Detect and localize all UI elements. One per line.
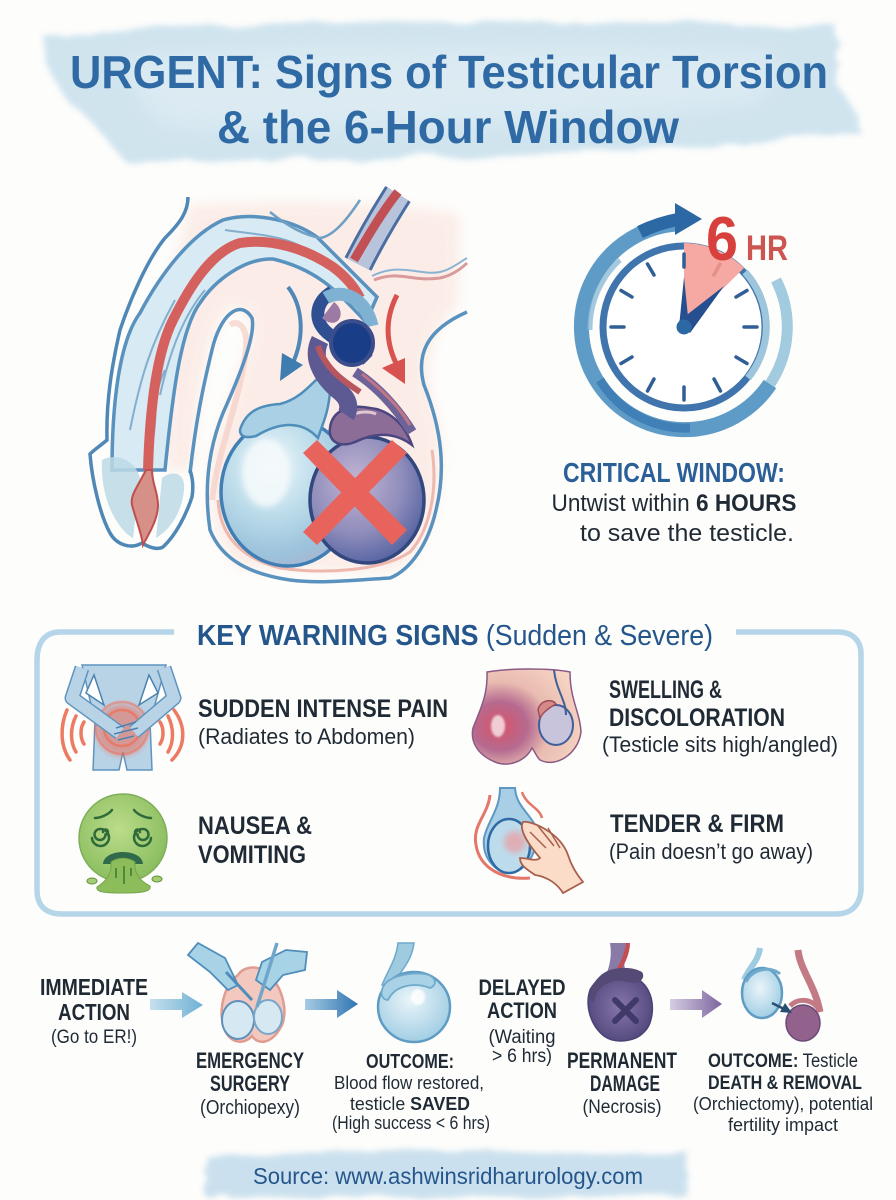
small side cord — [374, 263, 467, 280]
text: emergency surgery: EMERGENCY — [196, 1048, 304, 1073]
text: outcome saved: (High success < 6 hrs) — [332, 1113, 490, 1133]
text: outcome death: DEATH & REMOVAL — [708, 1072, 862, 1094]
panel: key warning signs — [37, 620, 861, 914]
flow: immediate action: ACTION — [58, 999, 130, 1025]
text: outcome saved: OUTCOME: — [366, 1051, 454, 1073]
panel frame — [37, 632, 861, 914]
text: nausea: NAUSEA & — [198, 812, 312, 840]
text: tender: (Pain doesn’t go away) — [609, 839, 813, 864]
text: emergency surgery: (Orchiopexy) — [200, 1097, 300, 1119]
glans lobes — [102, 457, 140, 538]
icon: swelling — [472, 669, 581, 764]
urethra red line — [148, 242, 360, 470]
title: URGENT: Signs of Testicular Torsion — [70, 46, 828, 98]
text: outcome saved: Blood flow restored, — [334, 1072, 484, 1093]
title: & the 6-Hour Window — [217, 101, 679, 153]
arrow: surgery to outcome — [305, 990, 358, 1018]
text: outcome death: OUTCOME: Testicle — [708, 1050, 858, 1072]
icon: abdominal pain — [62, 665, 183, 770]
critical window text: CRITICAL WINDOW: — [563, 457, 785, 488]
text: permanent damage: PERMANENT — [567, 1048, 677, 1073]
arrow: down red — [382, 295, 405, 384]
text: outcome death: fertility impact — [728, 1114, 838, 1135]
text: tender: TENDER & FIRM — [610, 810, 784, 838]
text: emergency surgery — [196, 1048, 304, 1119]
flow: immediate action: IMMEDIATE — [40, 974, 148, 1000]
text: outcome saved: testicle SAVED — [350, 1093, 470, 1114]
upper cord — [358, 194, 398, 264]
text: tender — [609, 810, 813, 864]
text: swelling: SWELLING & — [609, 676, 722, 704]
title banner wash — [44, 22, 860, 161]
critical window text: Untwist within 6 HOURS — [552, 490, 796, 517]
arrow: down blue — [280, 287, 303, 381]
text: outcome death — [693, 1050, 873, 1135]
arrow: damage to outcome — [670, 990, 722, 1018]
text: sudden intense pain — [198, 695, 448, 749]
red X — [303, 440, 407, 545]
source banner — [206, 1150, 690, 1198]
right testicle — [310, 437, 424, 563]
clock: 6 hour timer: 6 — [706, 205, 738, 274]
scrotum outline — [190, 309, 467, 582]
heading: KEY WARNING SIGNS (Sudden & Severe) — [197, 620, 713, 652]
text: delayed action: > 6 hrs) — [492, 1046, 552, 1067]
text: delayed action: ACTION — [487, 998, 557, 1023]
arrow: immediate to surgery — [150, 992, 203, 1018]
icon: necrotic testicle — [588, 943, 652, 1041]
icon: nausea — [79, 794, 167, 893]
text: swelling: (Testicle sits high/angled) — [602, 732, 838, 757]
text: swelling: DISCOLORATION — [609, 704, 785, 732]
title — [70, 46, 828, 153]
critical window text: to save the testicle. — [580, 520, 794, 547]
text: delayed action: DELAYED — [478, 975, 566, 1000]
critical window text — [552, 457, 796, 547]
text: nausea: VOMITING — [198, 841, 306, 869]
flow: immediate action — [40, 974, 148, 1048]
text: emergency surgery: SURGERY — [210, 1071, 290, 1096]
text: delayed action: (Waiting — [488, 1027, 556, 1048]
text: swelling — [602, 676, 838, 757]
shaft — [112, 217, 377, 470]
anatomy illustration: torsion diagram — [90, 192, 467, 582]
text: sudden intense pain: (Radiates to Abdomen) — [198, 724, 415, 749]
clock: 6 hour timer: HR — [746, 229, 788, 268]
text: outcome saved — [332, 1051, 490, 1133]
right epididymis — [330, 407, 412, 445]
text: outcome death: (Orchiectomy), potential — [693, 1093, 873, 1114]
red wedge — [684, 243, 744, 327]
text: permanent damage: (Necrosis) — [582, 1097, 662, 1118]
text: sudden intense pain: SUDDEN INTENSE PAIN — [198, 695, 448, 723]
source banner: Source: www.ashwinsridharurology.com — [253, 1163, 643, 1189]
outer shaft line — [90, 197, 193, 548]
text: permanent damage — [567, 1048, 677, 1118]
icon: tender — [475, 788, 583, 893]
skin wash — [165, 202, 460, 572]
twisted cord — [318, 292, 368, 360]
icon: removed testicle — [742, 948, 820, 1041]
left epididymis — [240, 378, 330, 438]
text: nausea — [198, 812, 312, 869]
flow: immediate action: (Go to ER!) — [51, 1027, 137, 1048]
text: delayed action — [478, 975, 566, 1067]
clock: 6 hour timer — [581, 203, 788, 430]
left testicle — [221, 418, 355, 566]
icon: healthy testicle — [378, 943, 450, 1042]
text: permanent damage: DAMAGE — [590, 1071, 660, 1096]
icon: surgery — [188, 943, 307, 1042]
